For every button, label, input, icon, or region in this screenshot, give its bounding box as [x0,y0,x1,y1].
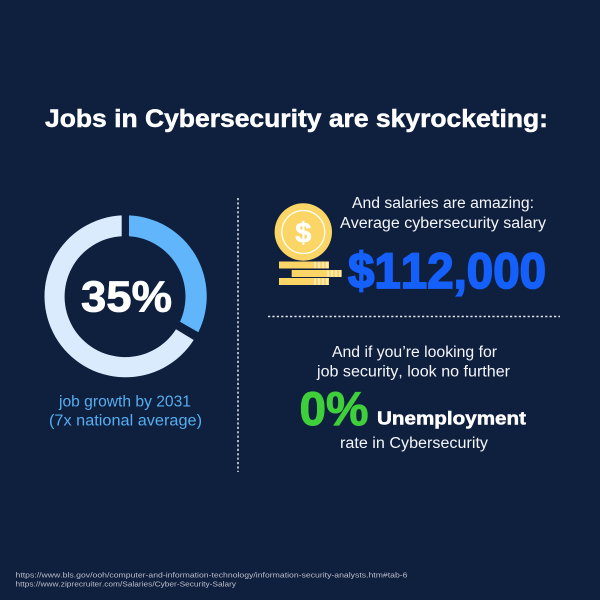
source links: https://www.bls.gov/ooh/computer-and-information-technology/information-security-analysts.htm#tab-6 [16,571,408,580]
job security intro text: job security, look no further [316,364,510,381]
unemployment figure: 0% [300,382,368,435]
job growth caption [49,394,202,430]
icon: gold coin and stack [275,203,342,285]
unemployment caption: rate in Cybersecurity [340,435,488,452]
salary intro text [340,195,546,232]
source links: https://www.ziprecruiter.com/Salaries/Cyber-Security-Salary [16,580,236,589]
job security intro text [316,344,510,381]
job growth caption: job growth by 2031 [58,394,191,410]
salary intro text: And salaries are amazing: [352,195,534,212]
donut chart: 35% job growth [44,215,207,377]
salary intro text: Average cybersecurity salary [340,215,546,232]
job security intro text: And if you’re looking for [332,344,497,361]
unemployment label: Unemployment [377,408,526,428]
job growth caption: (7x national average) [49,412,202,430]
title: Jobs in Cybersecurity are skyrocketing: [45,105,548,133]
source links [16,571,408,589]
icon: gold coin and stack: $ [295,218,311,250]
donut chart: 35% job growth: 35% [81,272,172,322]
salary figure: $112,000 [348,243,546,299]
